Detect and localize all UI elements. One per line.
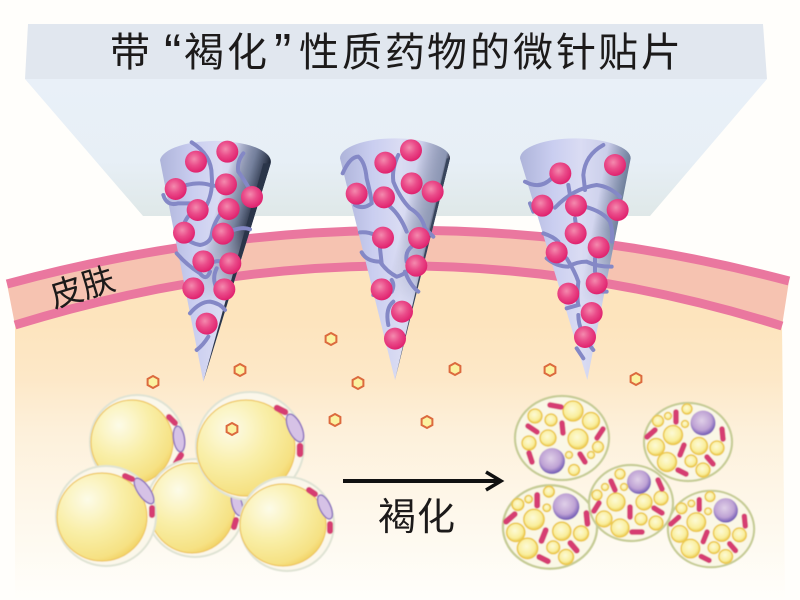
browned cell 3: [589, 465, 673, 541]
title: 带: [110, 31, 150, 75]
microneedle 2: [340, 138, 450, 380]
title: 褐化: [184, 31, 267, 75]
fat cell E: [240, 477, 335, 571]
fat cell C: [56, 466, 158, 566]
skin label: 皮肤: [45, 260, 119, 315]
microneedle patch backing: [25, 24, 767, 216]
microneedle 1: [160, 141, 271, 382]
title: ”: [274, 24, 291, 82]
browning label: 褐化: [378, 497, 455, 539]
browned cell 2: [644, 403, 732, 481]
browned cell 1: [515, 396, 609, 480]
title: 性质药物的微针贴片: [299, 31, 681, 75]
skin and tissue background: [7, 230, 789, 600]
title: “: [164, 24, 181, 82]
left group: fat cells before browning: [56, 392, 335, 571]
browned cell 5: [668, 491, 754, 567]
microneedle 3: [520, 138, 631, 380]
fat cell center: [146, 459, 245, 557]
browned cell 4: [503, 485, 597, 569]
right group: browned fat cells: [503, 396, 754, 569]
released drug particles: [148, 333, 641, 435]
fat cell A: [90, 395, 186, 489]
arrow: [343, 472, 501, 490]
fat cell D: [196, 392, 307, 500]
title: [110, 24, 681, 82]
